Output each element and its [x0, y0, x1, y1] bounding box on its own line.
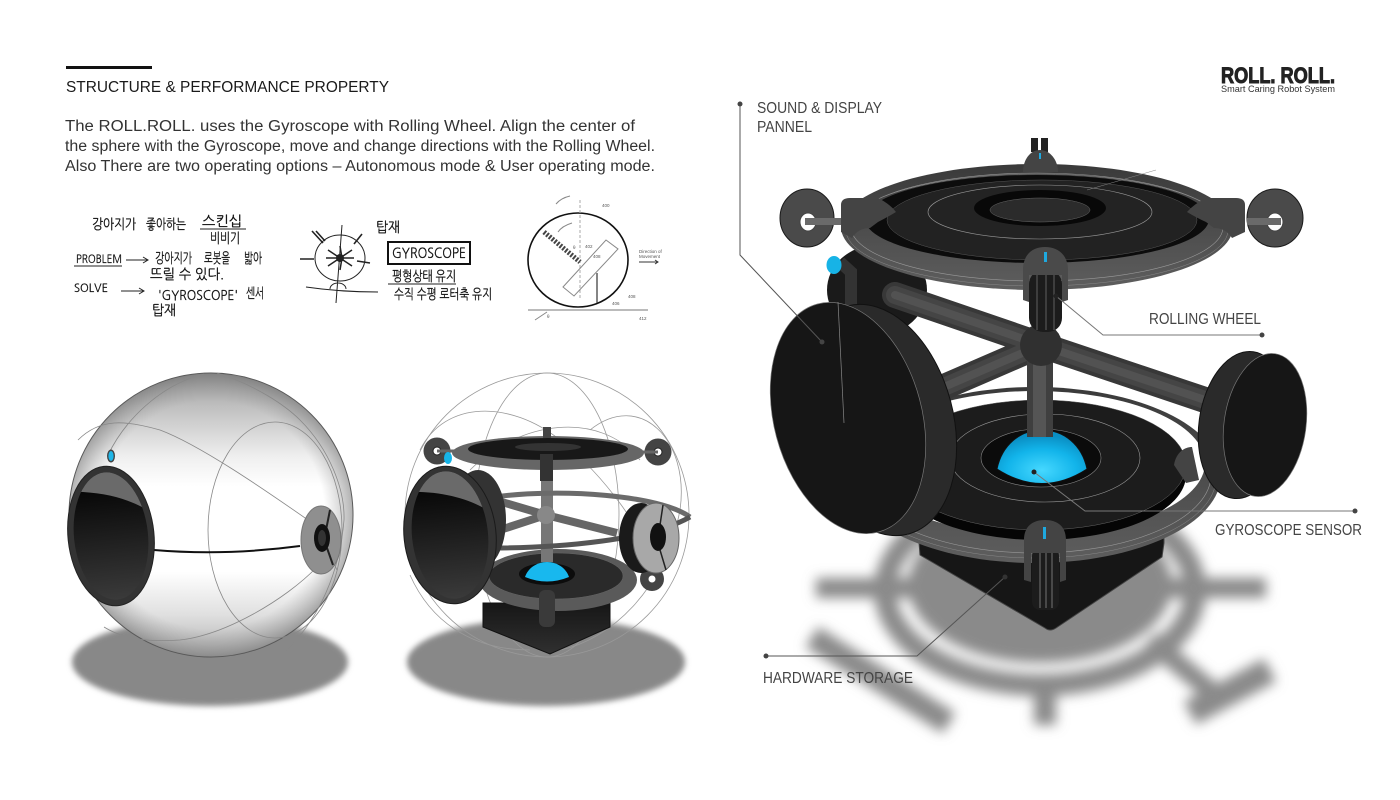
- top ring: [841, 164, 1233, 290]
- callout: rolling wheel: ROLLING WHEEL: [1149, 311, 1261, 328]
- handwritten note: problem and solution: 스킨십: [202, 214, 242, 229]
- patent diagram: sphere with direction of movement: Direction of: [639, 249, 663, 254]
- handwritten note: problem and solution: SOLVE: [74, 282, 108, 294]
- sketch: gyroscope concept: 평형상태 유지: [392, 269, 456, 284]
- open sphere robot with internal structure: [397, 373, 690, 706]
- side panel: [450, 470, 506, 570]
- callout: sound and display panel: PANNEL: [757, 119, 812, 136]
- handwritten note: problem and solution: 뜨릴 수 있다.: [150, 267, 224, 282]
- large robot exploded render: [746, 138, 1316, 630]
- handwritten note: problem and solution: 로봇을: [204, 251, 230, 266]
- handwritten note: problem and solution: 'GYROSCOPE': [158, 289, 238, 302]
- handwritten note: problem and solution: 비비기: [210, 231, 240, 246]
- upper ring assembly: [452, 436, 644, 470]
- patent diagram: sphere with direction of movement: θ: [573, 245, 576, 250]
- patent diagram: sphere with direction of movement: 408: [593, 254, 601, 259]
- equatorial ring segment: [494, 493, 690, 517]
- handwritten note: problem and solution: 밟아: [244, 251, 263, 266]
- closed sphere robot: [60, 373, 353, 706]
- handwritten note: problem and solution: [74, 214, 264, 318]
- sketch: gyroscope concept: 탑재: [376, 220, 400, 235]
- callout: gyroscope sensor: GYROSCOPE SENSOR: [1215, 522, 1362, 539]
- body text: The ROLL.ROLL. uses the Gyroscope with Rolling Wheel. Align the center of: [65, 118, 636, 135]
- right small wheel: [1187, 189, 1303, 247]
- handwritten note: problem and solution: 탑재: [152, 303, 176, 318]
- patent diagram: sphere with direction of movement: 412: [639, 316, 647, 321]
- inner mast and arms: [541, 470, 553, 562]
- patent diagram: sphere with direction of movement: [528, 196, 663, 321]
- callout: sound and display panel: SOUND & DISPLAY: [757, 100, 882, 117]
- hardware storage box: [918, 530, 1164, 630]
- sketch: gyroscope concept: 수직 수평 로터축 유지: [394, 287, 492, 302]
- patent diagram: sphere with direction of movement: Movement: [639, 254, 661, 259]
- left small wheel: [780, 189, 896, 247]
- mast hub: [1020, 324, 1062, 366]
- back disc: [827, 245, 927, 335]
- patent diagram: sphere with direction of movement: 402: [585, 244, 593, 249]
- lower gyroscope ring: [849, 387, 1221, 563]
- lower gyroscope ring: [479, 549, 637, 611]
- right side panel: [1189, 346, 1316, 504]
- central mast: [1027, 345, 1053, 437]
- blue sensor button and neck pipe: [826, 256, 851, 305]
- rolling wheel: [1023, 247, 1068, 332]
- lower mount: [1174, 447, 1199, 483]
- callout: gyroscope sensor: [1032, 470, 1362, 539]
- logo: ROLL. ROLL.: [1221, 63, 1335, 88]
- blue gyroscope dome: [997, 430, 1087, 484]
- cross arms: [895, 295, 1205, 400]
- body text: the sphere with the Gyroscope, move and change directions with the Rolling Wheel.: [65, 138, 655, 155]
- handwritten note: problem and solution: 좋아하는: [146, 217, 186, 232]
- patent diagram: sphere with direction of movement: 400: [602, 203, 610, 208]
- storage box: [483, 603, 610, 654]
- large robot shadow: [812, 495, 1270, 725]
- handwritten note: problem and solution: 센서: [246, 286, 264, 301]
- logo: Smart Caring Robot System: [1221, 84, 1335, 95]
- right side disc: [619, 503, 663, 573]
- handwritten note: problem and solution: 강아지가: [92, 217, 137, 232]
- callout: sound and display panel: [738, 100, 882, 344]
- body text: Also There are two operating options – Autonomous mode & User operating mode.: [65, 158, 655, 175]
- logo: [1221, 63, 1335, 95]
- callout: rolling wheel: [1054, 294, 1264, 338]
- sketch: gyroscope concept: [300, 220, 492, 303]
- callout: hardware storage: HARDWARE STORAGE: [763, 670, 913, 687]
- top finger: [1023, 138, 1058, 172]
- sketch: gyroscope concept: GYROSCOPE: [392, 247, 466, 261]
- body text: [65, 118, 655, 175]
- sound and display panel: [746, 285, 981, 553]
- lower rolling wheel: [1024, 520, 1066, 610]
- handwritten note: problem and solution: 강아지가: [155, 251, 193, 266]
- heading accent bar: [66, 66, 152, 69]
- patent diagram: sphere with direction of movement: 408: [628, 294, 636, 299]
- patent diagram: sphere with direction of movement: θ: [547, 314, 550, 319]
- lower wheel: [539, 590, 555, 627]
- handwritten note: problem and solution: PROBLEM: [76, 253, 122, 265]
- title: STRUCTURE & PERFORMANCE PROPERTY: [66, 79, 389, 96]
- patent diagram: sphere with direction of movement: 406: [612, 301, 620, 306]
- callout: hardware storage: [763, 574, 1008, 687]
